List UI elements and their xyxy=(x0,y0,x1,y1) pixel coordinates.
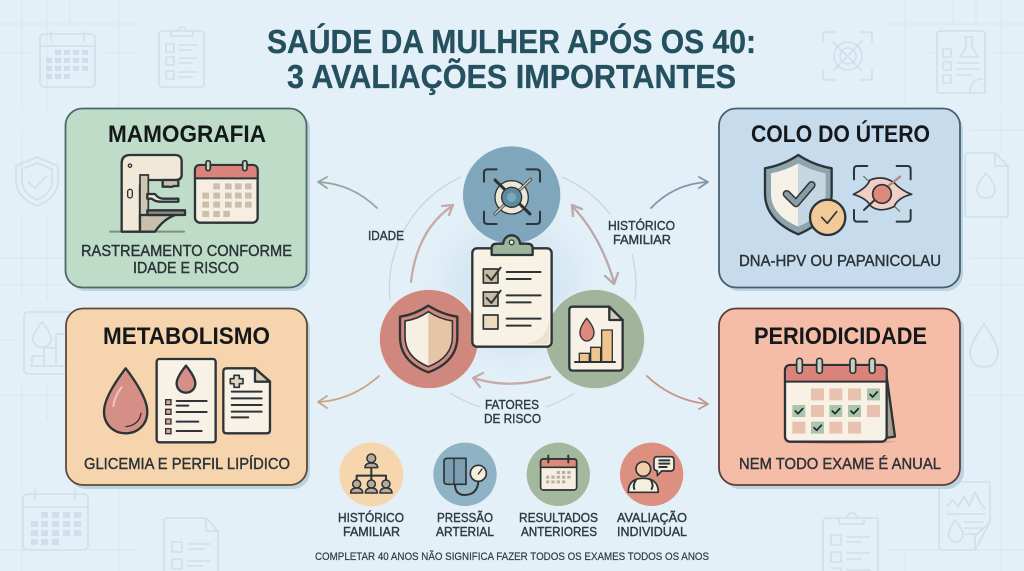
item: resultados anteriores xyxy=(519,443,598,539)
icon: cervix scan xyxy=(853,166,912,222)
label: PRESSÃO xyxy=(437,510,493,525)
heading: metabolismo: METABOLISMO xyxy=(103,323,270,350)
label: idade: IDADE xyxy=(368,228,404,243)
label: fatores de risco: DE RISCO xyxy=(484,411,541,426)
label: histórico familiar xyxy=(608,218,675,247)
label: fatores de risco xyxy=(484,397,541,426)
title xyxy=(267,23,756,95)
icon: clipboard checklist xyxy=(472,235,552,347)
text: mamografia description: RASTREAMENTO CONFORME xyxy=(81,243,292,260)
arrow: bottom cycle xyxy=(473,373,550,387)
background icon: drop right xyxy=(970,324,998,367)
icon: blood drop xyxy=(104,368,147,433)
icon: calendar results xyxy=(527,443,590,506)
arrow: to colo do útero xyxy=(651,177,708,208)
arrow: left cycle xyxy=(411,205,453,282)
background icon: lab report top right xyxy=(937,31,985,93)
title: 3 AVALIAÇÕES IMPORTANTES xyxy=(287,58,736,95)
icon: lab report xyxy=(157,359,216,442)
icon: family tree xyxy=(339,442,403,506)
heading: colo do útero: COLO DO ÚTERO xyxy=(751,120,930,148)
item: histórico familiar: FAMILIAR xyxy=(343,524,400,539)
icon: blood pressure cuff xyxy=(433,443,497,506)
heading: periodicidade: PERIODICIDADE xyxy=(754,323,927,350)
panel: periodicidade xyxy=(719,308,964,489)
icon: shield with check xyxy=(765,155,845,235)
panel: mamografia xyxy=(66,108,310,291)
background icon: shield left xyxy=(16,157,58,206)
central diagram xyxy=(379,146,645,407)
label: histórico familiar: HISTÓRICO xyxy=(608,218,675,233)
item: pressão arterial xyxy=(433,443,497,539)
panel: metabolismo xyxy=(66,308,310,489)
background icon: drop report right xyxy=(965,153,1008,217)
icon: doctor with speech bubble xyxy=(620,443,683,506)
label: AVALIAÇÃO xyxy=(617,510,687,525)
icon: calendar with checks xyxy=(780,358,898,444)
label: RESULTADOS xyxy=(519,510,598,525)
arrow: right cycle xyxy=(572,205,618,284)
footer note: COMPLETAR 40 ANOS NÃO SIGNIFICA FAZER TODOS OS EXAMES TODOS OS ANOS xyxy=(315,550,709,563)
icon: red shield circle xyxy=(379,289,479,389)
background icon: chart report right xyxy=(939,482,990,550)
icon: green report circle xyxy=(545,289,645,389)
background icon: target top right xyxy=(823,32,872,80)
title: SAÚDE DA MULHER APÓS OS 40: xyxy=(267,23,756,60)
background icon: document bottom left xyxy=(164,518,218,571)
label: histórico familiar: FAMILIAR xyxy=(613,232,671,247)
background icon: drop chart left xyxy=(24,312,74,374)
text: metabolismo description: GLICEMIA E PERFIL LIPÍDICO xyxy=(84,454,290,473)
label: HISTÓRICO xyxy=(338,510,404,525)
arrow: to mamografia xyxy=(318,177,377,208)
panel: colo do útero xyxy=(719,108,963,291)
text: periodicidade description: NEM TODO EXAME É ANUAL xyxy=(739,454,941,473)
item: resultados anteriores: ANTERIORES xyxy=(521,524,597,539)
background icon: calendar bottom left xyxy=(23,490,88,550)
text: colo do útero description: DNA-HPV OU PAPANICOLAU xyxy=(739,253,941,270)
item: histórico familiar xyxy=(338,442,404,539)
arrow: to metabolismo xyxy=(318,376,379,408)
background icon: clipboard bottom right xyxy=(823,513,878,571)
item: avaliação individual: INDIVIDUAL xyxy=(617,524,687,539)
background icon: clipboard top left xyxy=(159,27,204,87)
heading: mamografia: MAMOGRAFIA xyxy=(108,121,266,148)
text: mamografia description: IDADE E RISCO xyxy=(133,260,239,277)
background icon: calendar top left xyxy=(40,32,95,87)
label: fatores de risco: FATORES xyxy=(485,397,539,412)
item: pressão arterial: ARTERIAL xyxy=(436,524,494,539)
arrow: to periodicidade xyxy=(647,376,708,409)
text: mamografia description xyxy=(81,243,292,277)
item: avaliação individual xyxy=(617,443,687,539)
icon: medical document xyxy=(223,368,270,433)
icon: blue scan circle xyxy=(462,146,561,244)
icon: calendar xyxy=(195,161,258,223)
icon: mammography machine xyxy=(110,155,185,232)
